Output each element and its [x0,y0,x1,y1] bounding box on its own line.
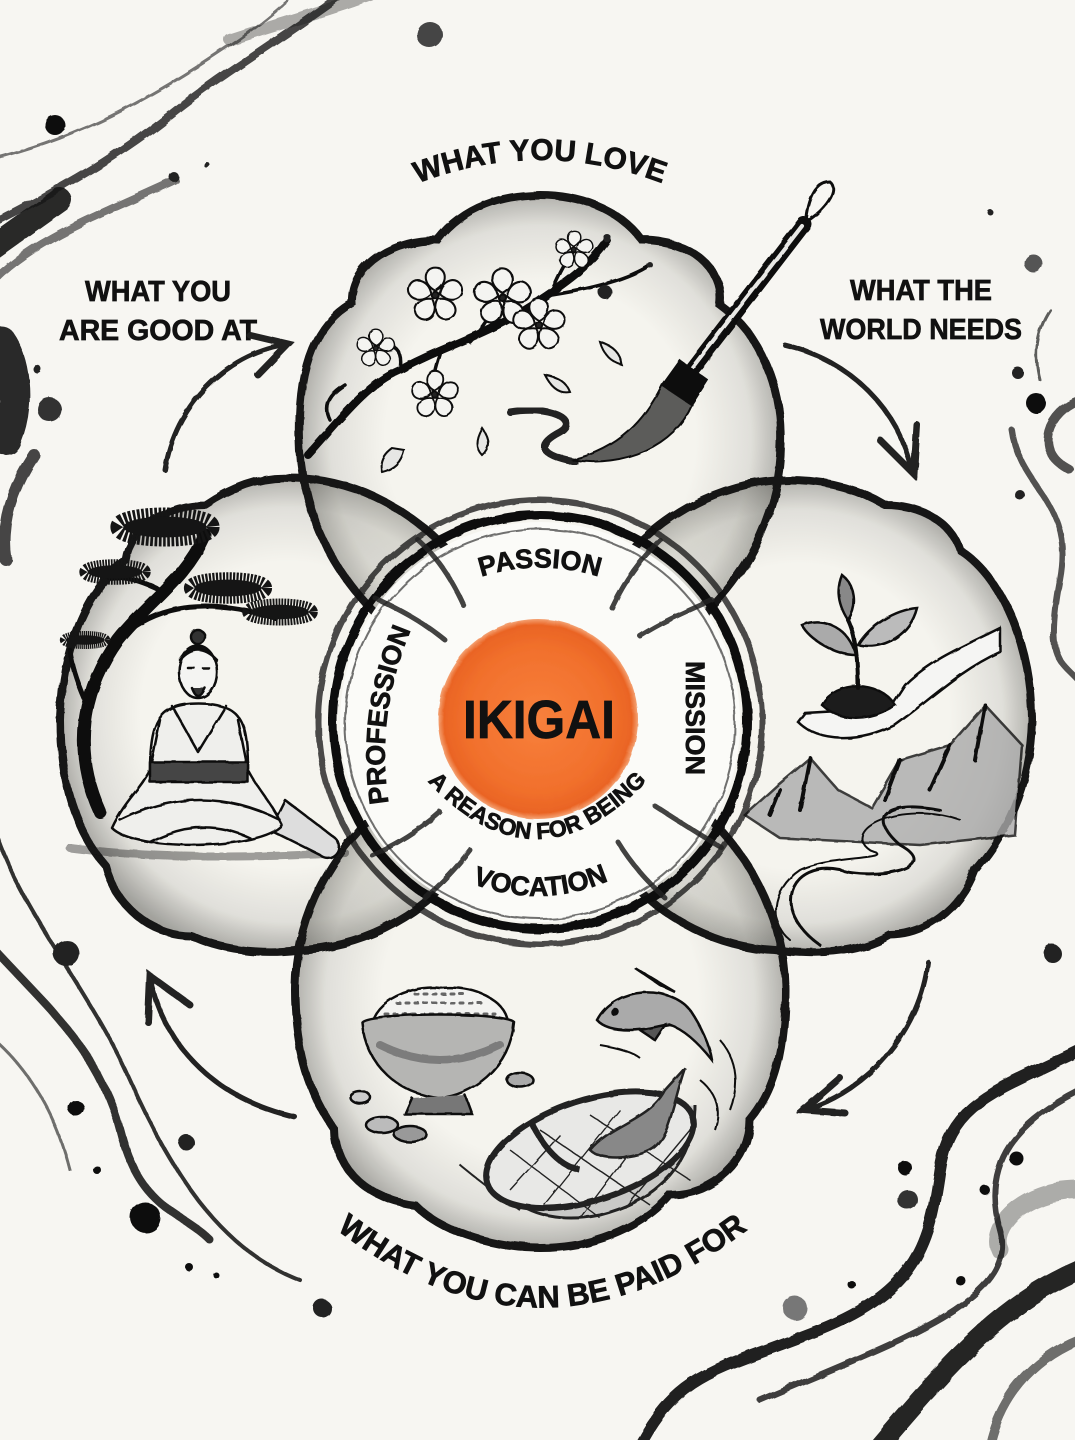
ring label: mission: MISSION [680,661,710,775]
ring label: vocation: VOCATION [478,864,608,896]
ring label: profession: PROFESSION [366,624,411,804]
heading: what the world needs: WHAT THE [850,275,992,307]
heading: what you are good at: ARE GOOD AT [59,315,257,347]
heading: what you are good at [59,276,257,347]
icon: mountains and river [745,705,1022,945]
arrow: love to world needs [785,345,917,474]
icon: fish basket [460,1068,708,1231]
ink swirl: bottom right [640,1050,1075,1440]
icon: rice bowl [350,987,533,1142]
icon: seedling in hand [798,575,1000,738]
center circle [315,496,766,948]
heading: what the world needs: WORLD NEEDS [820,314,1022,346]
icon: calligraphy brush [572,182,833,462]
heading: what you love: WHAT YOU LOVE [410,138,668,184]
ink swirl: top left [0,0,443,560]
arrow: paid to good at [148,976,295,1117]
ink swirl: bottom left [0,830,331,1317]
icon: ink swirl stroke [510,410,575,462]
panel: what you are good at (left petal) [60,478,515,952]
panel: what the world needs (right petal) [565,480,1032,953]
petal lines entering center [372,540,722,898]
heading: what you can be paid for: WHAT YOU CAN BE PAID FOR [340,1212,748,1308]
heading: what you are good at: WHAT YOU [85,276,231,308]
title: ikigai: IKIGAI [463,690,615,750]
icon: orange sun [438,619,638,819]
icon: cherry blossom branch [308,231,653,472]
ring label: passion: PASSION [478,548,602,577]
panel: petal washes [60,195,1032,1248]
panel: what you can be paid for (bottom petal) [295,748,785,1248]
arrow: world needs to paid [803,962,928,1113]
icon: leaping fish [597,968,736,1130]
heading: what the world needs [820,275,1022,346]
icon: pine tree [70,535,275,812]
icon: meditating figure [70,630,345,858]
arrow: good at to love [165,335,288,470]
tagline: a reason for being: A REASON FOR BEING [427,772,645,840]
panel: what you love (top petal) [300,195,781,682]
ink swirl: right side [987,209,1075,962]
